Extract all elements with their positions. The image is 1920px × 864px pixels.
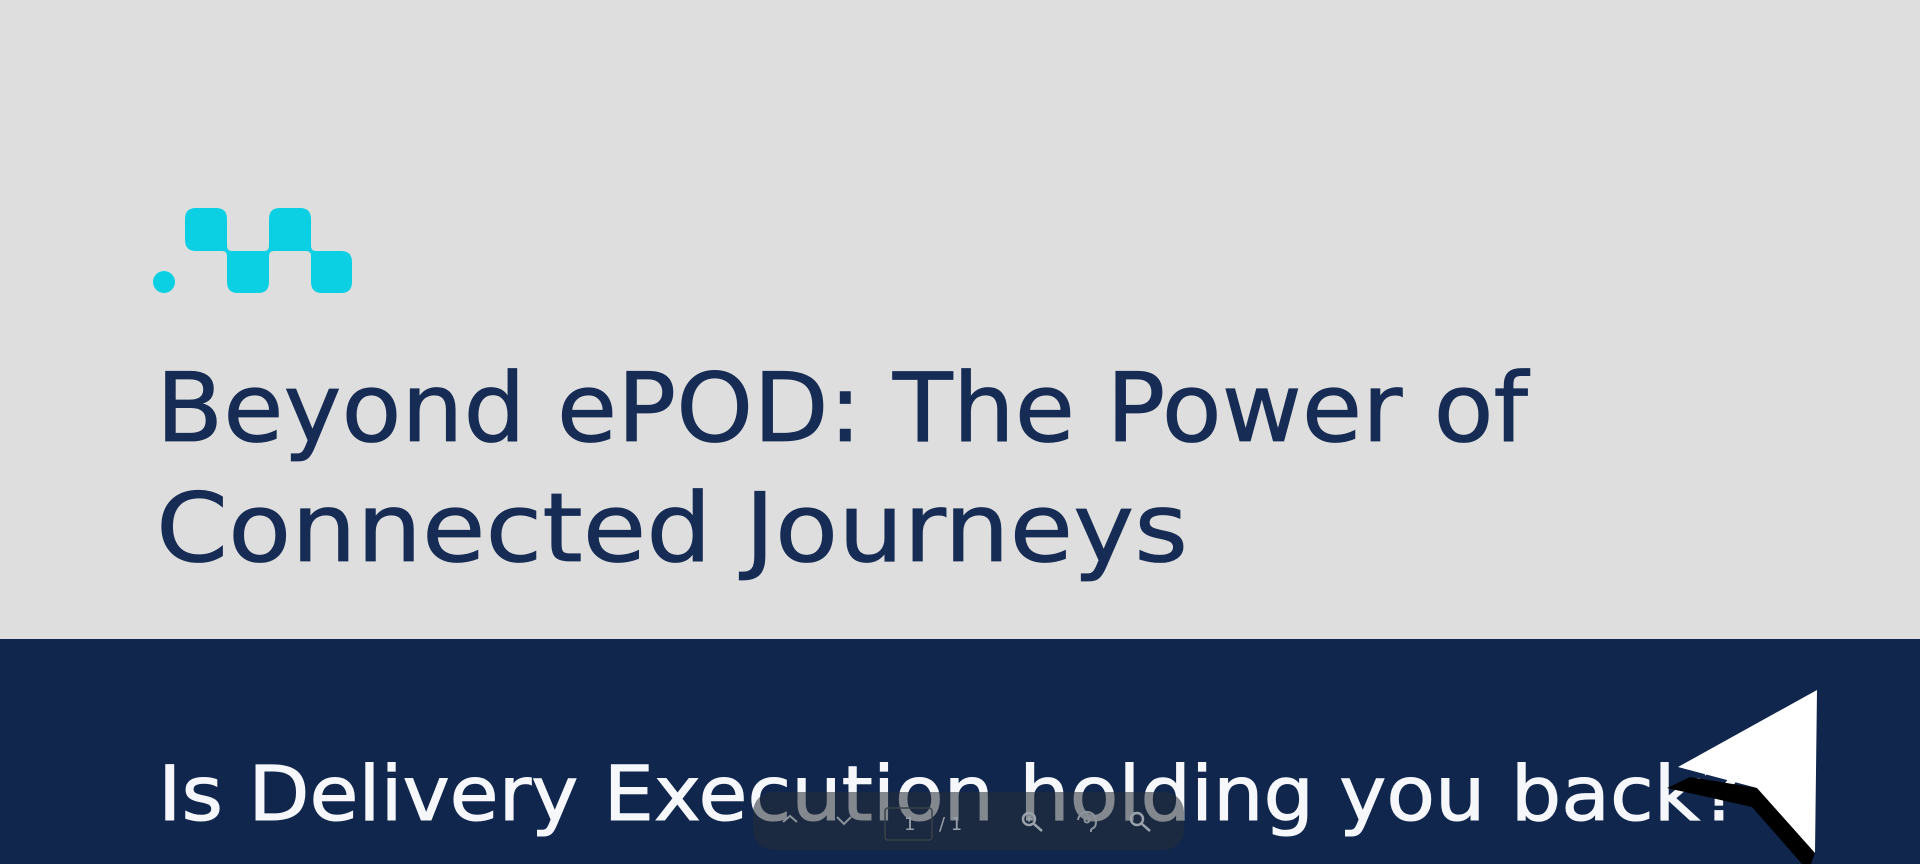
- icon: rotate: [1078, 812, 1096, 832]
- title: Connected Journeys: [156, 474, 1188, 584]
- icon: cyan checker logo: [153, 208, 352, 293]
- subtitle: Is Delivery Execution holding you back?: [158, 749, 1742, 838]
- icon: previous page chevron: [783, 816, 797, 822]
- page number box: [885, 808, 932, 840]
- panel: light title background: [0, 0, 1920, 639]
- title: Beyond ePOD: The Power of: [156, 354, 1531, 464]
- page number: 1: [904, 814, 915, 835]
- panel: navy subtitle band: [0, 639, 1920, 864]
- cursor shadow: [1667, 777, 1815, 864]
- page count: / 1: [939, 814, 962, 835]
- cursor body: [1678, 690, 1817, 853]
- icon: zoom in: [1023, 813, 1042, 831]
- title: [156, 354, 1531, 584]
- icon: large cursor arrow: [1667, 690, 1817, 864]
- icon: next page chevron: [837, 817, 851, 824]
- PDF viewer toolbar: [753, 792, 1184, 850]
- toolbar background: [753, 792, 1184, 850]
- icon: zoom out: [1131, 813, 1150, 831]
